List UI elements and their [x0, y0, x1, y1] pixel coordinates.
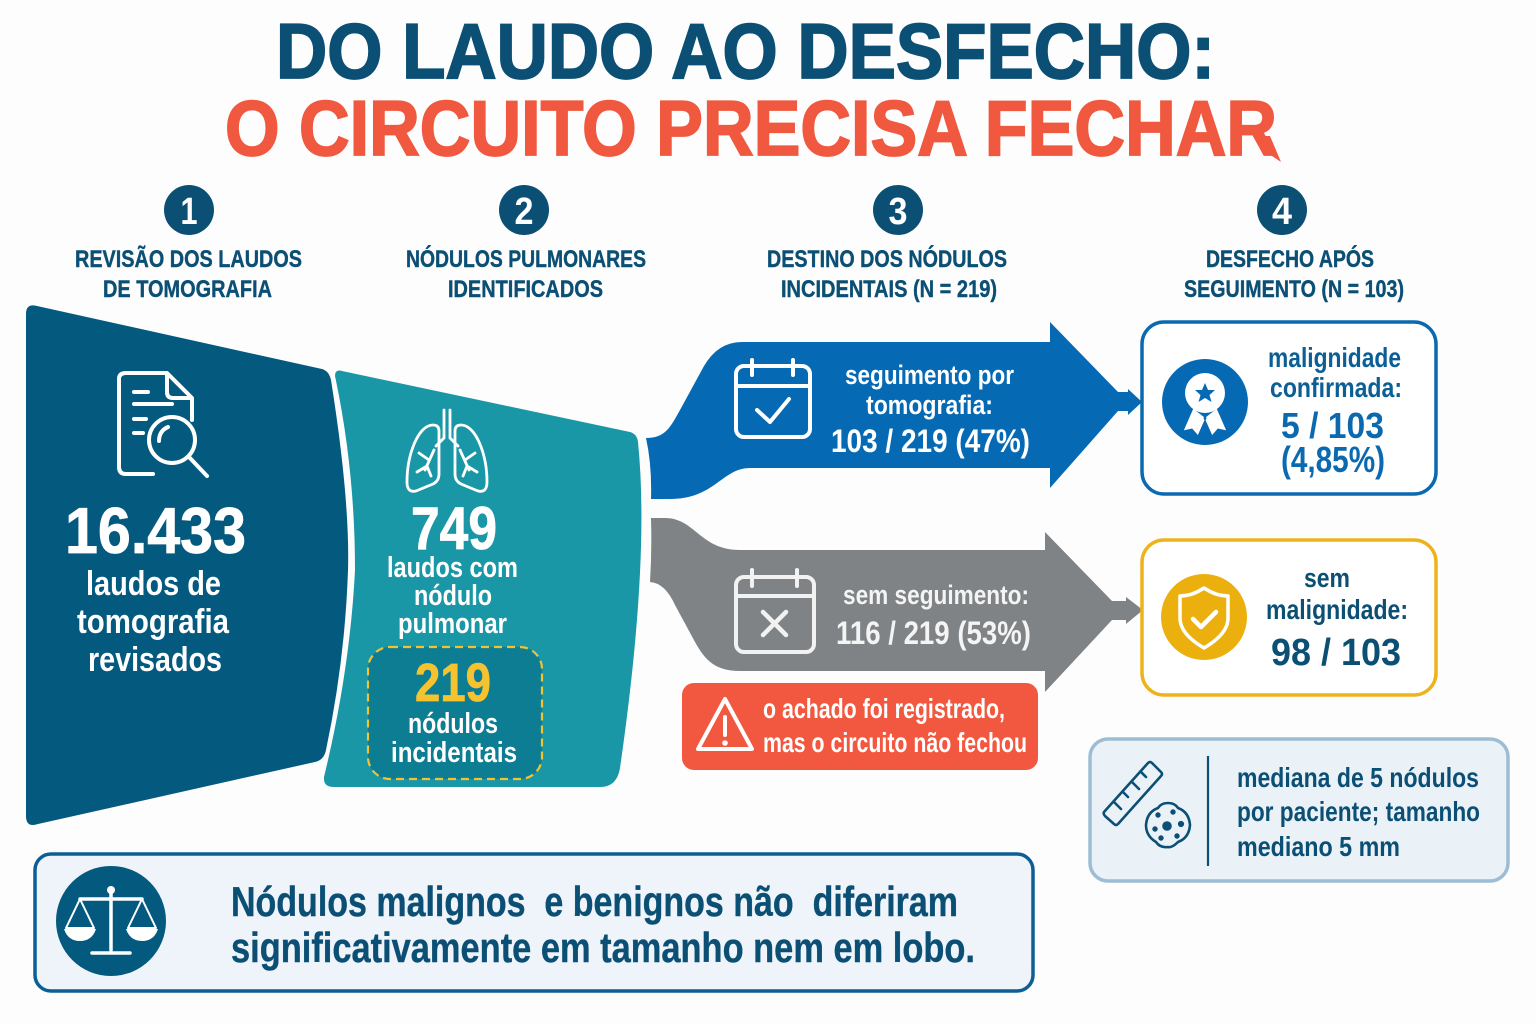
panel: confirmed malignancy: 5 / 103 [1281, 405, 1384, 446]
arrow: follow-up by CT: tomografia: [866, 390, 993, 420]
arrow: no follow-up: 116 / 219 (53%) [836, 615, 1031, 651]
callout: circuit did not close: o achado foi registrado, [763, 693, 1005, 724]
callout: circuit did not close: mas o circuito não fechou [763, 727, 1027, 758]
icon: calendar with cross [736, 570, 814, 652]
step 1 heading: DE TOMOGRAFIA [103, 276, 272, 303]
panel: median nodules and size: mediano 5 mm [1237, 831, 1400, 862]
callout: 219 incidental nodules: incidentais [391, 737, 517, 769]
panel: median nodules and size: mediana de 5 nódulos [1237, 762, 1479, 793]
step 4 heading: DESFECHO APÓS [1206, 245, 1374, 273]
panel: confirmed malignancy: malignidade [1268, 342, 1401, 373]
callout: 219 incidental nodules: nódulos [408, 708, 498, 740]
step 3 heading: INCIDENTAIS (N = 219) [781, 276, 997, 303]
panel: no malignancy: sem [1304, 563, 1350, 593]
panel: conclusion: significativamente em tamanho nem em lobo. [231, 924, 975, 971]
step 2 heading: 2 [514, 191, 534, 233]
panel: 16.433 reports funnel stage: revisados [88, 641, 222, 679]
panel: confirmed malignancy: (4,85%) [1281, 439, 1385, 480]
icon: ruler and nodule [1104, 762, 1190, 847]
title [225, 7, 1281, 172]
panel: 749 reports funnel stage: nódulo [414, 580, 492, 612]
icon: scales of justice [56, 866, 166, 976]
panel: conclusion: Nódulos malignos e benignos não diferiram [231, 878, 958, 925]
panel: 749 reports funnel stage: laudos com [387, 552, 518, 584]
panel: 16.433 reports funnel stage [26, 305, 348, 825]
callout: 219 incidental nodules: 219 [415, 653, 491, 713]
arrow: follow-up by CT: 103 / 219 (47%) [831, 423, 1030, 459]
title: O CIRCUITO PRECISA FECHAR [225, 84, 1277, 172]
step 2 heading [406, 185, 646, 303]
step 3 heading: 3 [888, 191, 908, 233]
step 4 heading: SEGUIMENTO (N = 103) [1184, 276, 1404, 303]
panel: no malignancy [1142, 540, 1436, 695]
step 2 heading: NÓDULOS PULMONARES [406, 245, 646, 273]
icon: calendar with check [736, 360, 810, 437]
step 4 heading: 4 [1272, 191, 1292, 233]
panel: 749 reports funnel stage: pulmonar [398, 608, 507, 640]
callout: 219 incidental nodules [368, 647, 542, 779]
arrow: follow-up by CT: seguimento por [845, 360, 1014, 390]
step 2 heading: IDENTIFICADOS [448, 276, 603, 303]
arrow: no follow-up: sem seguimento: [843, 580, 1029, 610]
panel: 16.433 reports funnel stage: laudos de [86, 565, 221, 603]
panel: median nodules and size [1090, 739, 1508, 881]
icon: document with magnifier [119, 373, 207, 476]
icon: lungs [407, 410, 487, 491]
arrow: follow-up by CT [646, 322, 1142, 499]
panel: 16.433 reports funnel stage: tomografia [77, 603, 230, 641]
icon: medal [1162, 359, 1248, 445]
title: DO LAUDO AO DESFECHO: [276, 7, 1215, 95]
icon: shield with check [1161, 574, 1247, 660]
step 1 heading [75, 185, 302, 303]
step 3 heading [767, 185, 1007, 303]
step 1 heading: REVISÃO DOS LAUDOS [75, 245, 302, 273]
panel: confirmed malignancy: confirmada: [1270, 372, 1402, 403]
panel: no malignancy: malignidade: [1266, 594, 1408, 625]
panel: confirmed malignancy [1142, 322, 1436, 494]
panel: no malignancy: 98 / 103 [1271, 632, 1401, 674]
icon: warning triangle [698, 699, 752, 749]
panel: 16.433 reports funnel stage: 16.433 [65, 494, 246, 567]
panel: 749 reports funnel stage: 749 [411, 495, 497, 562]
callout: circuit did not close [682, 683, 1038, 770]
arrow: no follow-up [650, 518, 1143, 692]
step 1 heading: 1 [180, 191, 198, 233]
panel: median nodules and size: por paciente; tamanho [1237, 796, 1480, 827]
step 3 heading: DESTINO DOS NÓDULOS [767, 245, 1007, 273]
panel: conclusion [35, 854, 1033, 991]
step 4 heading [1184, 185, 1404, 303]
panel: 749 reports funnel stage [324, 371, 641, 787]
